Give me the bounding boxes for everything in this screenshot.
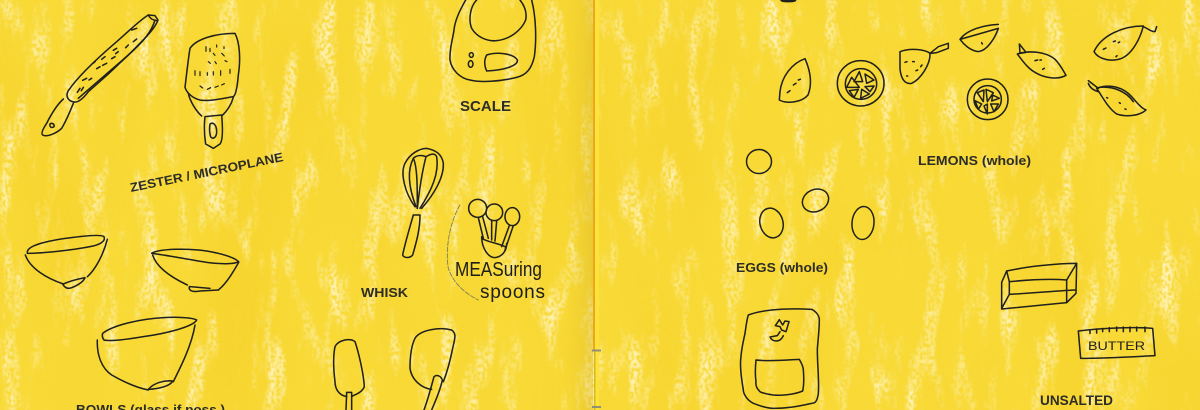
handwritten label: measuring spoons: MEASuring: [455, 259, 542, 281]
centre fold and staples: [592, 0, 601, 410]
handwritten label: butter: BUTTER: [1088, 339, 1145, 353]
icon: scale: [450, 0, 536, 81]
label: unsalted: UNSALTED: [1040, 392, 1113, 408]
icon: zester: [42, 15, 158, 136]
icon: flour bag: [740, 309, 819, 408]
label: scale: SCALE: [460, 98, 511, 115]
label: lemons: LEMONS (whole): [918, 153, 1031, 168]
icon: measuring spoons: [447, 199, 520, 300]
handwritten label: measuring spoons: [455, 259, 545, 303]
icon: whisk: [403, 148, 443, 257]
icon: bowls: [25, 235, 239, 390]
icon: eggs: [746, 150, 875, 240]
icon: lemons: [779, 0, 1157, 120]
handwritten label: measuring spoons: spoons: [480, 282, 545, 303]
icon: butter: [1002, 263, 1155, 358]
icon: microplane: [185, 33, 240, 148]
label: whisk: WHISK: [361, 285, 409, 300]
label: eggs: EGGS (whole): [736, 260, 828, 275]
label: zester / microplane: ZESTER / MICROPLANE: [129, 150, 284, 195]
icon: spatulas: [334, 329, 455, 410]
